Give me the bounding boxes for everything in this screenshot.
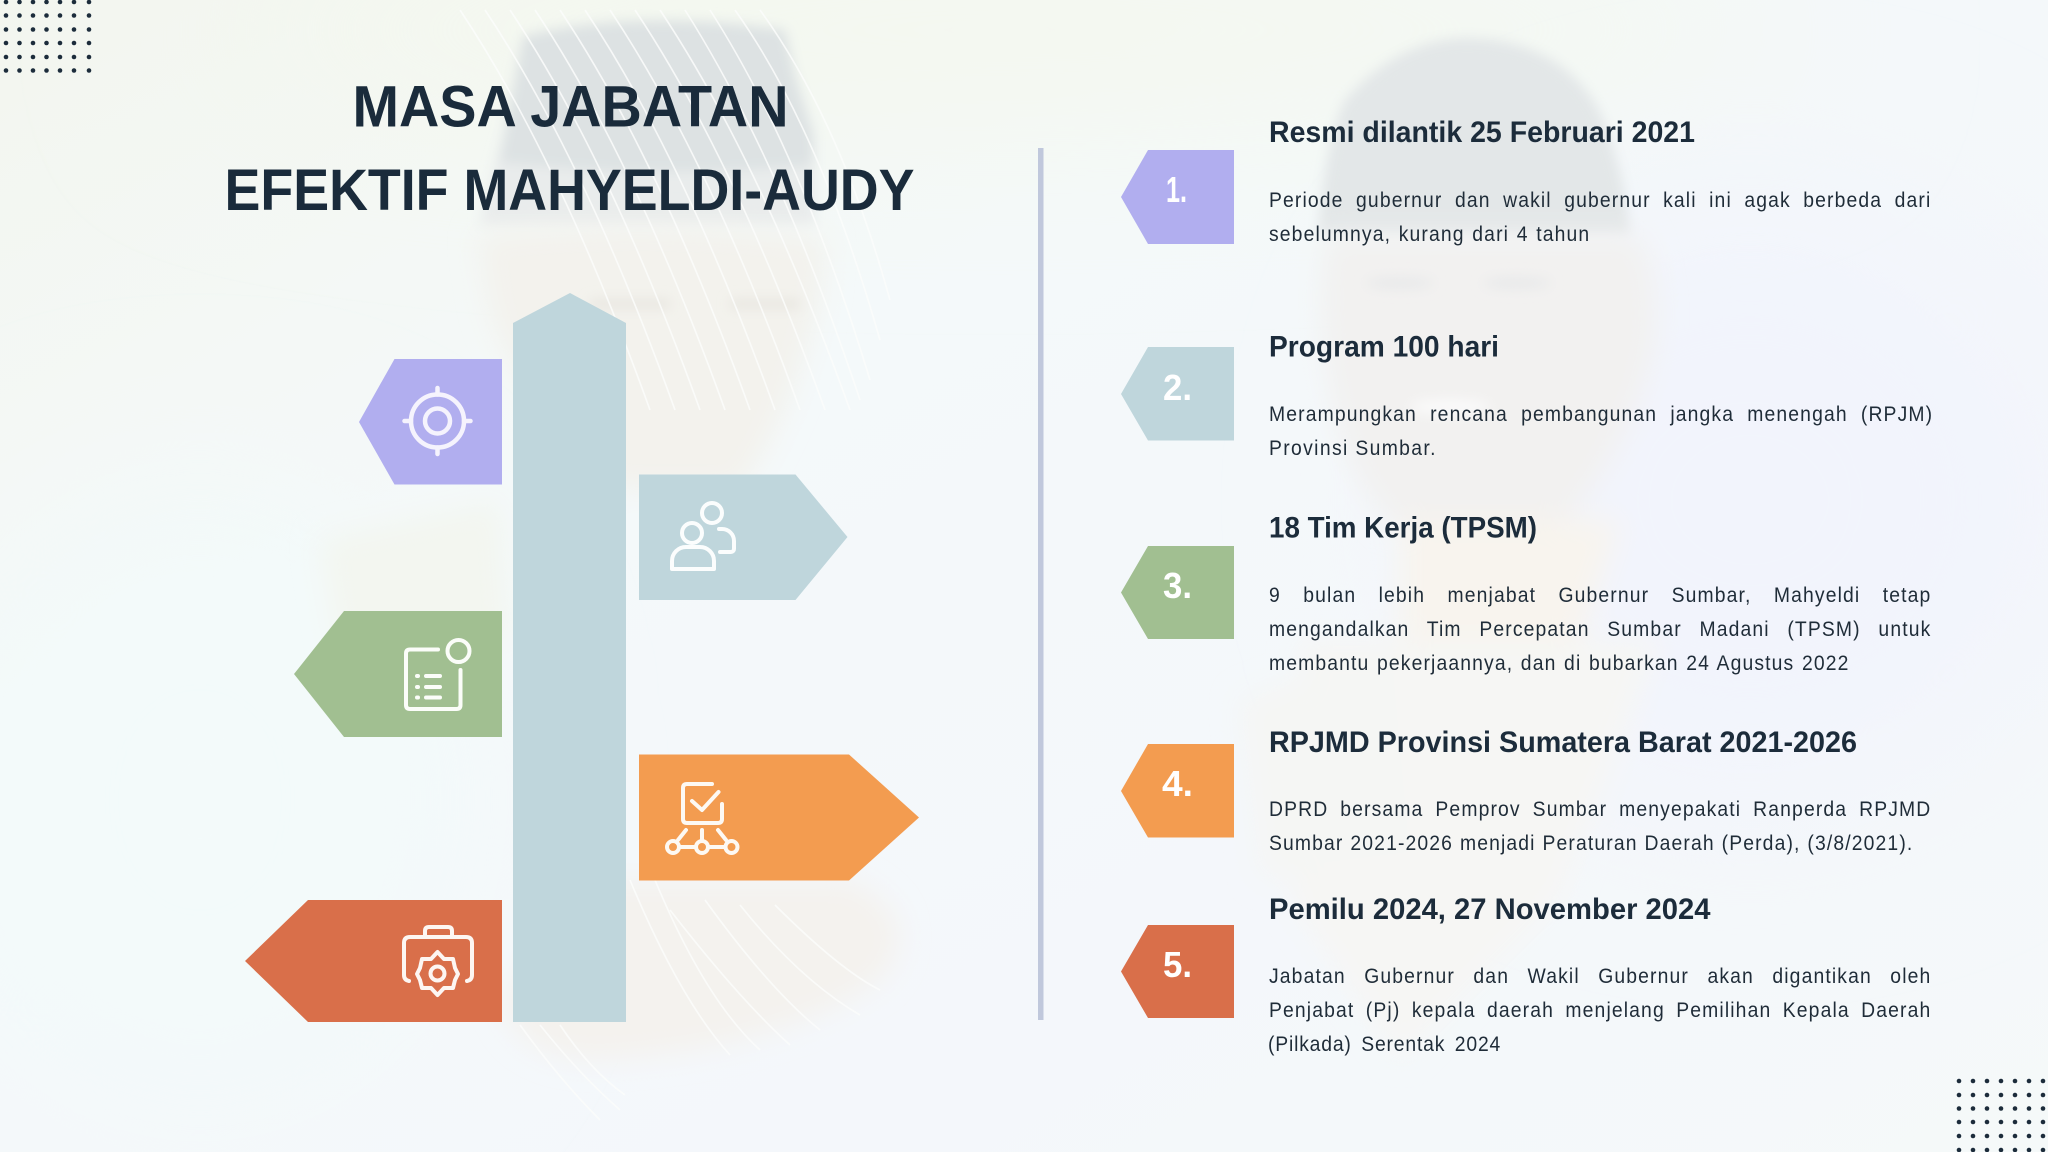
sign 1: purple with target icon [359, 359, 502, 484]
badge and heading 4: RPJMD Provinsi Sumatera Barat 2021-2026 [1269, 726, 1857, 759]
item 2 [1121, 330, 1933, 460]
central arrow pole [513, 293, 626, 1022]
badge and heading 5 [1121, 893, 1711, 1018]
badge and heading 5: 5. [1163, 944, 1192, 985]
body text 5: Jabatan Gubernur dan Wakil Gubernur akan digantikan oleh [1269, 964, 1931, 988]
body text 4: Sumbar 2021-2026 menjadi Peraturan Daerah (Perda), (3/8/2021). [1269, 831, 1913, 855]
body text 1 [1269, 188, 1931, 246]
sign 3: green with document icon [294, 611, 502, 737]
badge and heading 1: Resmi dilantik 25 Februari 2021 [1269, 116, 1695, 149]
title [224, 74, 914, 223]
title: EFEKTIF MAHYELDI-AUDY [224, 158, 914, 223]
badge and heading 4 [1121, 726, 1857, 838]
body text 5: Penjabat (Pj) kepala daerah menjelang Pemilihan Kepala Daerah [1269, 998, 1931, 1022]
body text 3: membantu pekerjaannya, dan di bubarkan 24 Agustus 2022 [1269, 651, 1850, 675]
decoration: bottom-right dot grid [1956, 1078, 2046, 1152]
badge and heading 4: 4. [1162, 763, 1193, 804]
item 1 [1121, 116, 1931, 246]
body text 3: 9 bulan lebih menjabat Gubernur Sumbar, Mahyeldi tetap [1269, 583, 1931, 607]
badge and heading 3 [1121, 512, 1537, 639]
item 5 [1121, 893, 1931, 1056]
badge and heading 2: 2. [1163, 367, 1192, 408]
badge and heading 3: 18 Tim Kerja (TPSM) [1269, 512, 1537, 544]
badge and heading 1: 1. [1166, 169, 1187, 210]
body text 5 [1268, 964, 1931, 1056]
decoration: top-left dot grid [4, 0, 92, 73]
body text 3: mengandalkan Tim Percepatan Sumbar Madani (TPSM) untuk [1269, 617, 1931, 641]
badge and heading 5: Pemilu 2024, 27 November 2024 [1269, 893, 1711, 926]
sign 4: orange with checklist network icon [639, 754, 919, 880]
body text 2: Provinsi Sumbar. [1269, 436, 1437, 460]
body text 1: sebelumnya, kurang dari 4 tahun [1269, 222, 1590, 246]
body text 1: Periode gubernur dan wakil gubernur kali ini agak berbeda dari [1269, 188, 1931, 212]
body text 2: Merampungkan rencana pembangunan jangka menengah (RPJM) [1269, 402, 1933, 426]
badge and heading 3: 3. [1163, 565, 1192, 606]
item 4 [1121, 726, 1931, 855]
body text 5: (Pilkada) Serentak 2024 [1268, 1032, 1501, 1056]
body text 2 [1269, 402, 1933, 460]
badge and heading 2: Program 100 hari [1269, 330, 1499, 364]
body text 3 [1269, 583, 1931, 675]
body text 4 [1269, 797, 1931, 855]
title: MASA JABATAN [352, 74, 788, 140]
decorative stripes over left portrait [460, 10, 890, 1120]
body text 4: DPRD bersama Pemprov Sumbar menyepakati Ranperda RPJMD [1269, 797, 1931, 821]
item 3 [1121, 512, 1931, 675]
badge and heading 2 [1121, 330, 1499, 440]
badge and heading 1 [1121, 116, 1695, 244]
sign 5: red with briefcase gear icon [245, 900, 502, 1022]
sign 2: blue with people icon [639, 474, 848, 600]
